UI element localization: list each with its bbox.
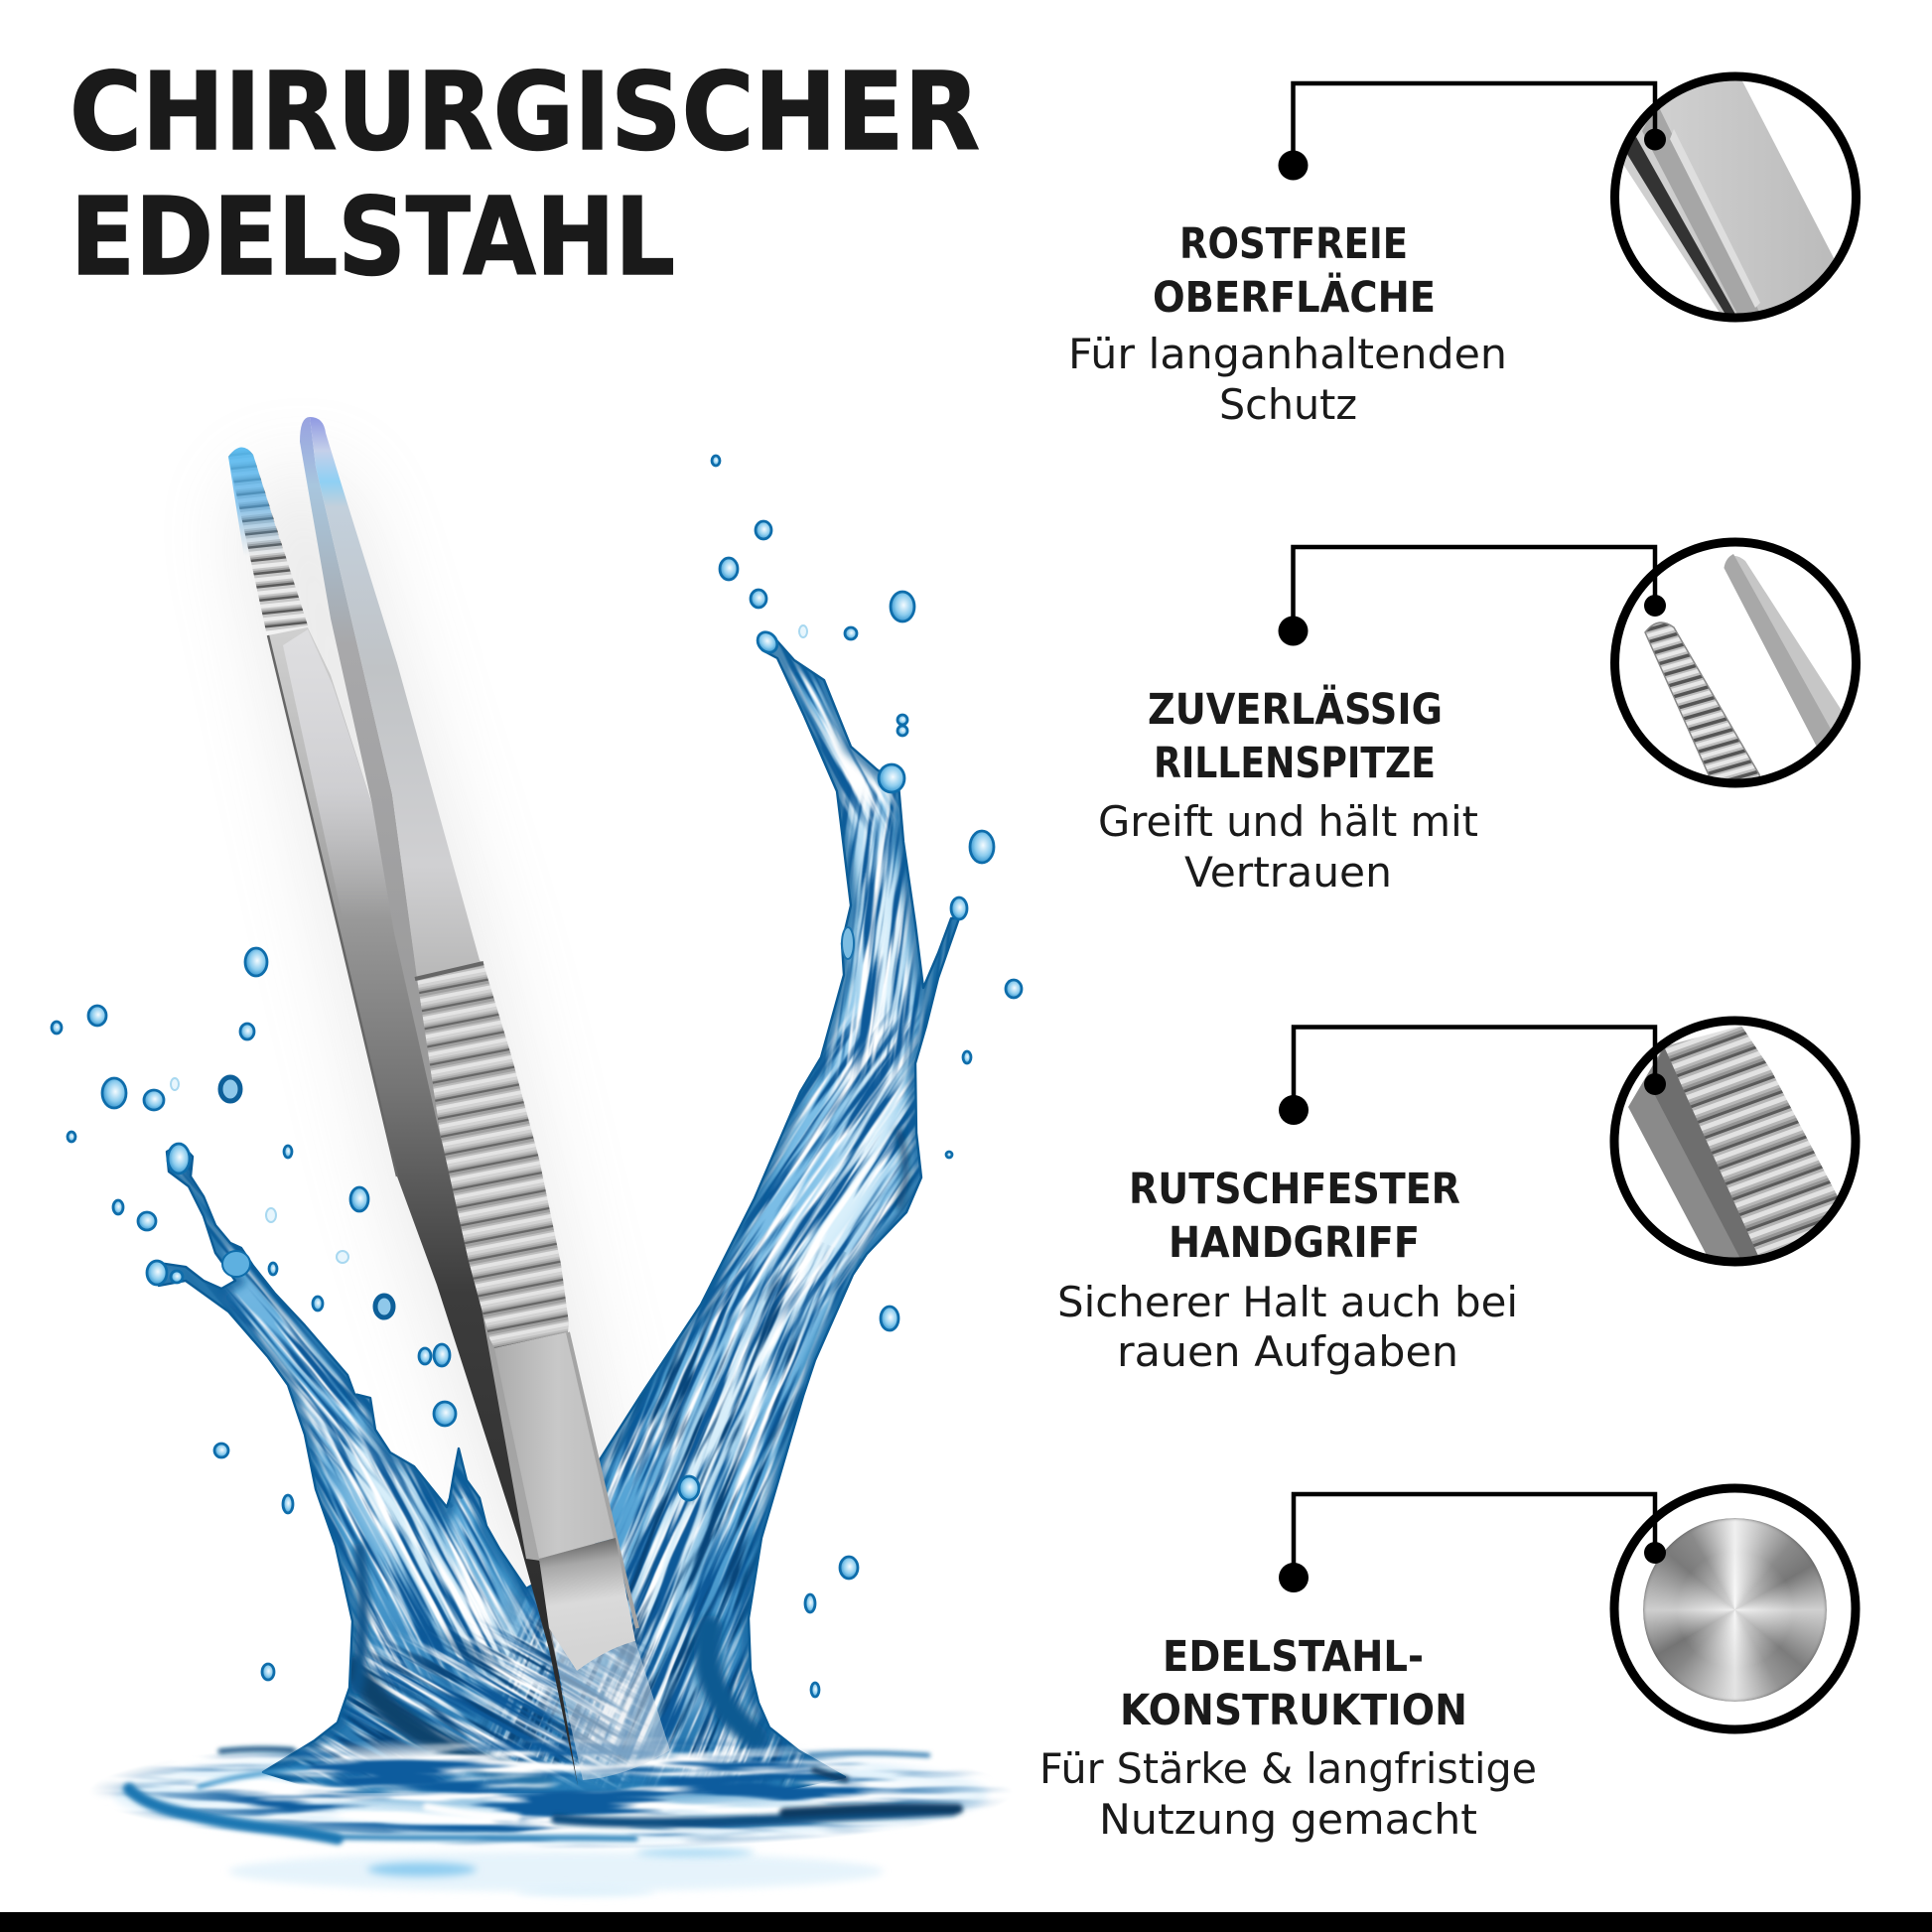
callout 2 heading: RILLENSPITZE: [1154, 740, 1436, 788]
splash dark edge: [159, 633, 959, 1792]
fold and tip: [539, 1538, 635, 1671]
callout 4 connector: [1279, 1494, 1666, 1592]
callout 2 connector: [1279, 547, 1666, 645]
title: EDELSTAHL: [70, 176, 675, 300]
splash streaks: [163, 644, 957, 1791]
callout 3 connector: [1279, 1027, 1666, 1125]
callout 1 description: [1068, 330, 1507, 429]
callout 2 heading: ZUVERLÄSSIG: [1148, 684, 1443, 735]
callout 3: Rutschfester Handgriff: [1057, 1021, 1856, 1376]
rear arm: [268, 627, 578, 1786]
callout 2 description: Vertrauen: [1184, 848, 1392, 897]
callout 2 description: Greift und hält mit: [1098, 797, 1478, 846]
callout 1 zoom circle: [1613, 69, 1857, 333]
submerged tip: [549, 1628, 670, 1780]
callout 2 description: [1098, 797, 1478, 897]
flat right edge: [568, 1332, 637, 1628]
callout 3 zoom circle: [1614, 1021, 1856, 1276]
callout 1 heading: OBERFLÄCHE: [1153, 272, 1436, 323]
callout 4 heading: EDELSTAHL-: [1163, 1633, 1424, 1682]
callout 1 heading: ROSTFREIE: [1179, 220, 1408, 269]
rear arm dark outer edge: [268, 635, 397, 1176]
illustration: water splash: [17, 456, 1162, 1922]
callout 3 heading: [1129, 1166, 1460, 1268]
bottom black bar: [0, 1912, 1932, 1932]
illustration: tweezers: [228, 417, 670, 1786]
callout 1: Rostfreie Oberfläche: [1068, 69, 1857, 429]
callout 1 description: Für langanhaltenden: [1068, 330, 1507, 378]
grip top edge: [415, 963, 483, 979]
callout 4 description: [1039, 1744, 1537, 1844]
callout 3 heading: HANDGRIFF: [1169, 1219, 1420, 1268]
callout 4: Edelstahl-Konstruktion: [1039, 1488, 1856, 1844]
front arm bevel: [300, 417, 541, 1561]
water droplets: [52, 456, 1022, 1697]
water pool surface: [95, 1736, 1007, 1849]
title: CHIRURGISCHER: [69, 51, 980, 175]
callout 4 description: Für Stärke & langfristige: [1039, 1744, 1537, 1793]
callout 1 description: Schutz: [1219, 380, 1357, 429]
flat lower section: [494, 1332, 616, 1559]
callout 2 heading: [1148, 684, 1443, 788]
callout 2 zoom circle: [1614, 542, 1876, 804]
callout 3 description: rauen Aufgaben: [1117, 1327, 1458, 1376]
callout 1 heading: [1153, 220, 1436, 323]
water tendril tips: [147, 628, 967, 1285]
callout 4 description: Nutzung gemacht: [1099, 1795, 1477, 1844]
tweezer soft shadow: [238, 477, 635, 1628]
water pool base: [114, 1747, 988, 1896]
rear arm light inner face: [283, 629, 394, 918]
title: [69, 51, 980, 300]
front arm face: [310, 417, 483, 978]
callout 2: Zuverlässig Rillenspitze: [1098, 542, 1876, 897]
callout 4 zoom circle with brushed metal disc: [1614, 1488, 1856, 1729]
callout 1 connector: [1279, 83, 1666, 181]
callout 4 heading: [1120, 1633, 1467, 1735]
rear arm tip with blue fade: [228, 447, 308, 631]
grip ridges: [417, 964, 569, 1348]
callout 3 description: Sicherer Halt auch bei: [1057, 1278, 1518, 1326]
splash body: arms and column: [159, 633, 959, 1792]
callout 3 description: [1057, 1278, 1518, 1376]
callout 3 heading: RUTSCHFESTER: [1129, 1166, 1460, 1214]
callout 4 heading: KONSTRUKTION: [1120, 1687, 1467, 1735]
